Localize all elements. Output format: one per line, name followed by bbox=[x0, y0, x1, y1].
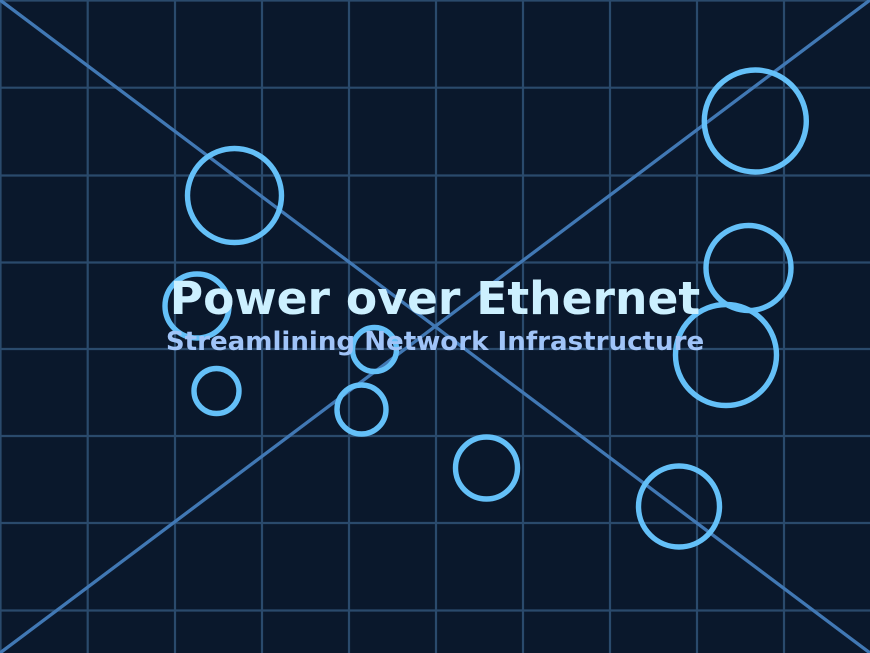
network node circles bbox=[165, 70, 806, 547]
title: Power over Ethernet bbox=[170, 272, 700, 325]
subtitle: Streamlining Network Infrastructure bbox=[166, 327, 704, 357]
